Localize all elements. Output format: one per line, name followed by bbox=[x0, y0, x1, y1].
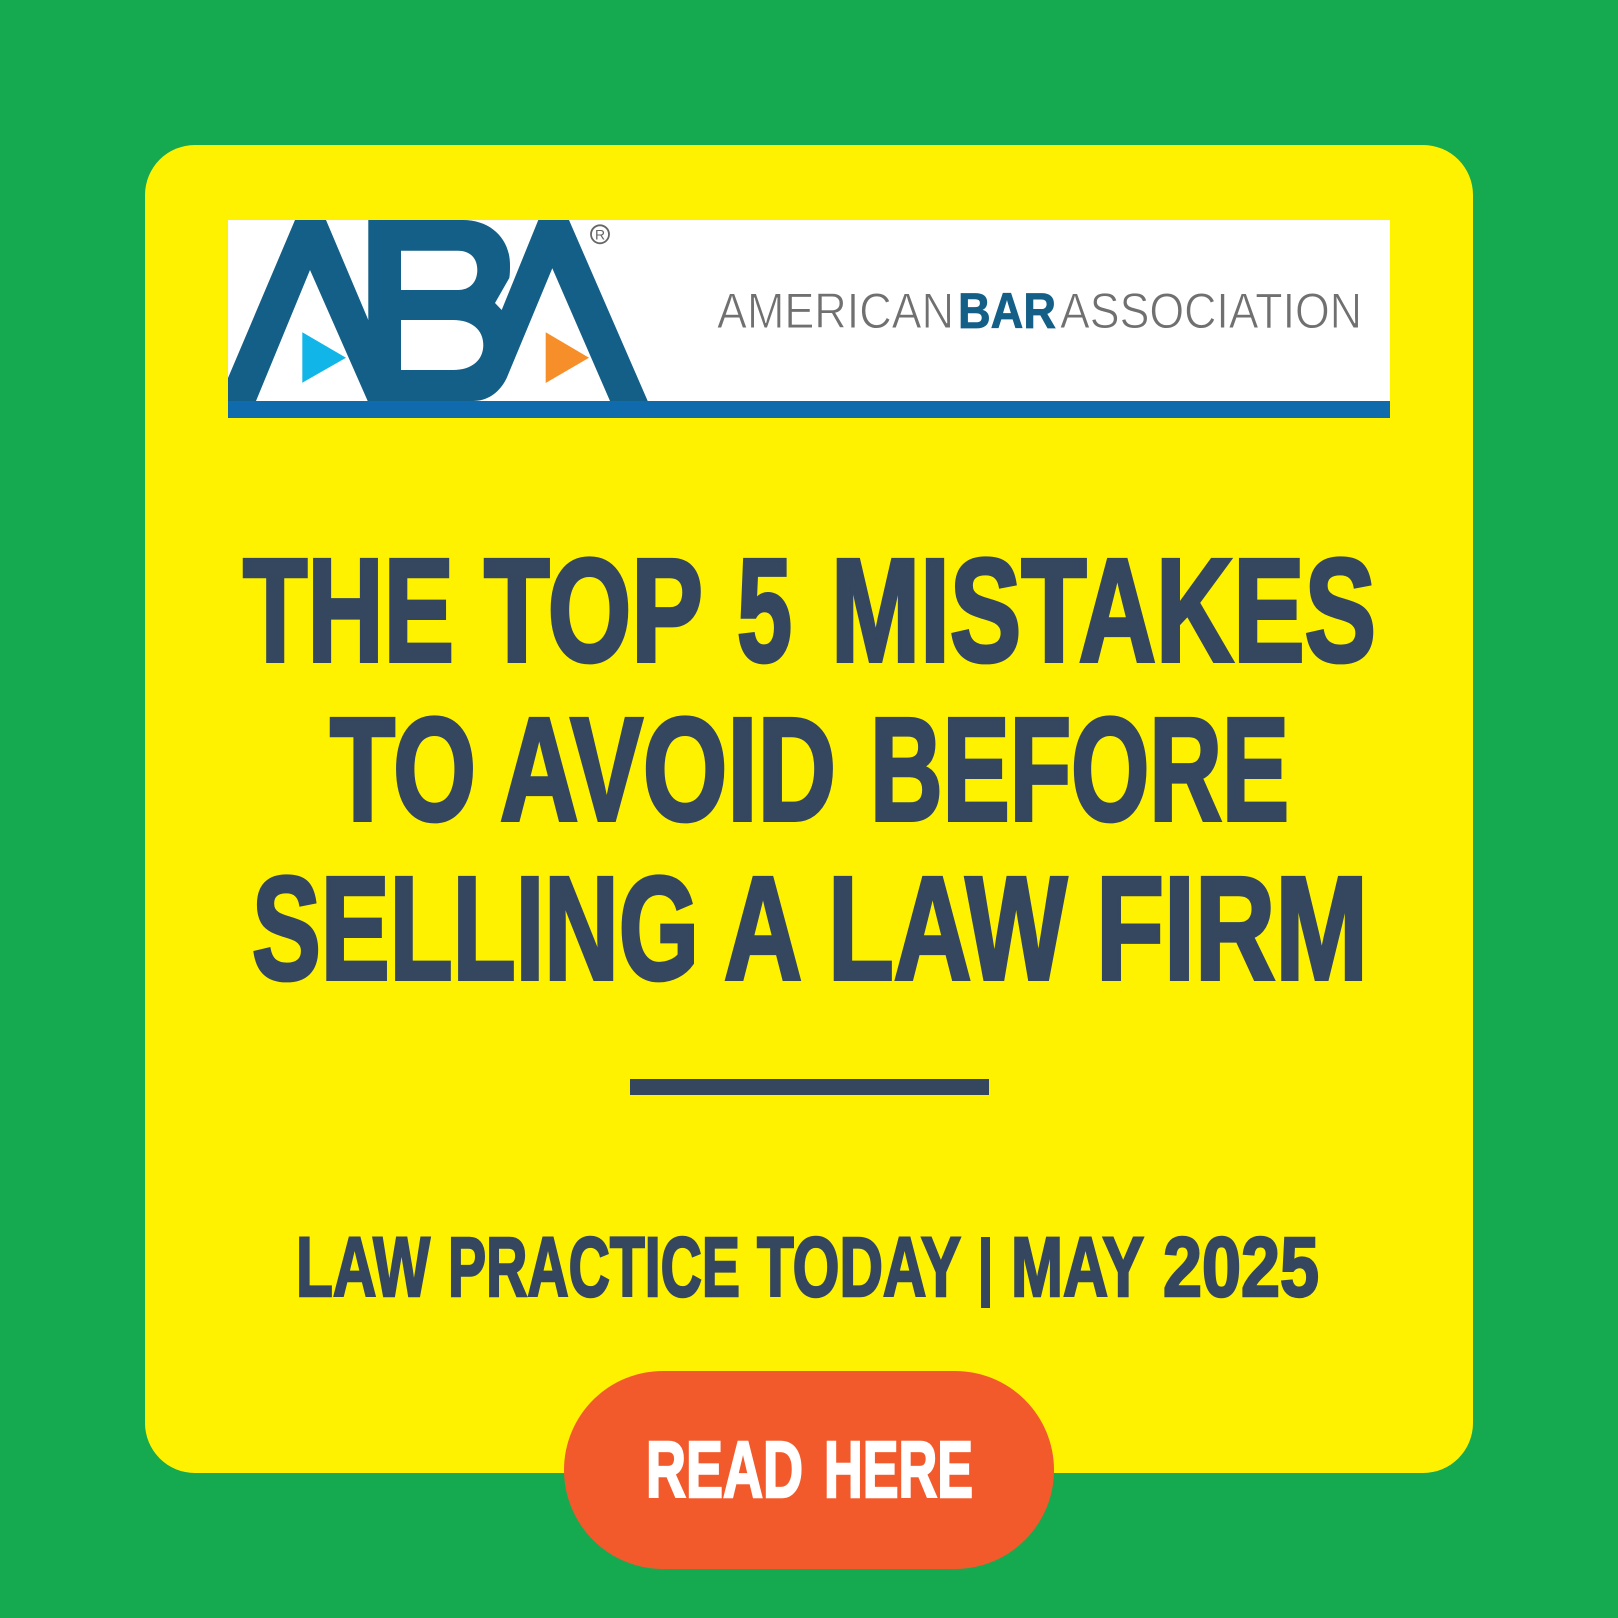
title: MISTAKES bbox=[831, 529, 1376, 693]
publication line: 2025 bbox=[1163, 1220, 1319, 1314]
title: TO bbox=[330, 688, 476, 852]
title: AVOID bbox=[500, 688, 836, 852]
title: A bbox=[724, 847, 802, 1011]
publication line: MAY bbox=[1011, 1220, 1144, 1314]
icon: cyan triangle bbox=[302, 332, 346, 383]
logo wordmark: BAR bbox=[958, 283, 1056, 339]
logo blue bar bbox=[228, 401, 1390, 418]
title bbox=[243, 529, 1376, 1011]
title: TOP bbox=[484, 529, 703, 693]
panel: yellow card bbox=[145, 145, 1473, 1473]
title: 5 bbox=[737, 529, 792, 693]
title: FIRM bbox=[1096, 847, 1368, 1011]
registered mark bbox=[591, 225, 609, 243]
logo wordmark: ASSOCIATION bbox=[1060, 283, 1362, 339]
divider rule bbox=[630, 1079, 989, 1095]
title: LAW bbox=[828, 847, 1067, 1011]
publication line: LAW bbox=[296, 1220, 431, 1314]
logo wordmark bbox=[717, 283, 1362, 339]
button: read here: READ bbox=[646, 1425, 803, 1514]
logo wordmark: AMERICAN bbox=[717, 283, 954, 339]
icon: orange triangle bbox=[546, 332, 589, 383]
logo: ABA monogram bbox=[228, 220, 648, 401]
logo: American Bar Association banner bbox=[228, 220, 1390, 418]
title: SELLING bbox=[252, 847, 699, 1011]
title: BEFORE bbox=[870, 688, 1289, 852]
title: THE bbox=[243, 529, 454, 693]
publication line bbox=[296, 1220, 1319, 1314]
button: read here bbox=[564, 1371, 1054, 1569]
registered mark: R bbox=[595, 226, 605, 242]
publication line: PRACTICE bbox=[448, 1220, 740, 1314]
publication line: TODAY bbox=[757, 1220, 961, 1314]
button: read here: HERE bbox=[824, 1425, 973, 1514]
